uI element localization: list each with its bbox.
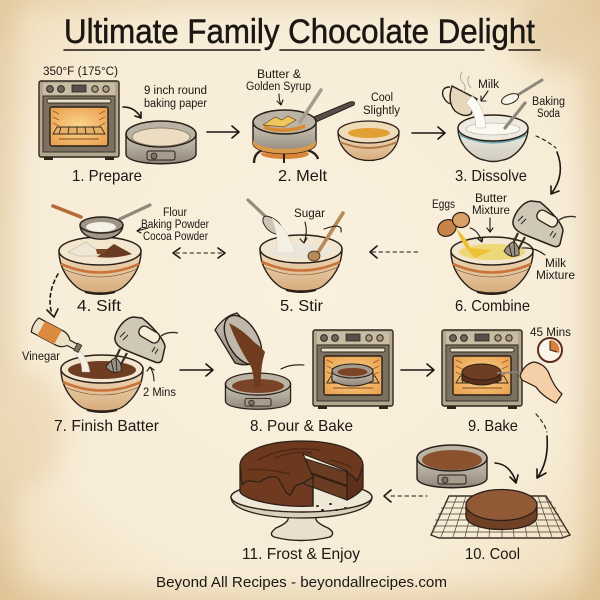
step 2: melt: Slightly (363, 105, 400, 117)
step label: 8. Pour & Bake (250, 418, 353, 435)
ingredient labels: Mixture (536, 270, 575, 282)
ingredients note: Flour (163, 207, 187, 219)
icon: tilted pan pouring batter (215, 309, 269, 387)
icon: vinegar bottle (30, 317, 90, 372)
milk label: Milk (478, 79, 499, 91)
timer note: 2 Mins (143, 387, 176, 399)
icon: bowl with batter (451, 237, 533, 294)
icon: mixing bowl (458, 115, 528, 162)
step 2: melt (246, 69, 400, 185)
step 2: melt: Golden Syrup (246, 81, 311, 93)
arrow: pan to oven (281, 365, 304, 369)
oven temperature label: 350°F (175°C) (43, 66, 118, 78)
step 8: pour and bake (215, 309, 393, 435)
icon: cake stand (231, 482, 372, 540)
ingredient labels: Milk (545, 258, 566, 270)
arrow: 4 to 7 (47, 274, 58, 317)
ingredient labels: Butter (475, 193, 507, 205)
icon: cooling rack (431, 496, 570, 538)
icon: cake on rack (466, 490, 537, 530)
step label: 3. Dissolve (455, 168, 527, 185)
arrow: 3 to 6 (536, 136, 560, 194)
step label: 11. Frost & Enjoy (242, 546, 360, 563)
step 1: prepare (39, 66, 207, 185)
step 1: prepare: baking paper (144, 98, 207, 110)
icon: frosted chocolate cake (240, 441, 363, 506)
icon: wooden spoon (308, 213, 343, 261)
baking soda label: Baking (532, 96, 565, 108)
icon: oven with pan (313, 330, 393, 409)
ingredients note: Cocoa Powder (143, 231, 208, 243)
icon: oven (39, 81, 119, 160)
icon: measuring spoon (500, 80, 542, 107)
icon: hand mixer (106, 317, 178, 373)
ingredients note (141, 207, 209, 243)
icon: bowl with sugar (260, 235, 342, 292)
cool note: Cool (371, 92, 393, 104)
icon: eggs (435, 212, 492, 258)
ingredient labels (432, 193, 575, 282)
butter note: Butter & (257, 69, 301, 81)
cake crumbs (317, 504, 346, 510)
arrow: pan to rack (495, 463, 518, 483)
step 5: stir (248, 200, 343, 315)
icon: sugar scoop (248, 200, 296, 253)
icon: hand with skewer (497, 362, 562, 403)
ingredients note: Baking Powder (141, 219, 209, 231)
arrow: 1 to 2 (207, 126, 239, 138)
step 4: sift (53, 205, 209, 315)
icon: bowl with flour and cocoa (59, 237, 141, 294)
icon: baked cake in pan (417, 445, 487, 488)
arrow: 10 to 11 (384, 490, 427, 502)
icon: bowl with batter (61, 355, 143, 412)
step label: 10. Cool (465, 546, 520, 563)
arrow: 6 to 5 (370, 246, 421, 258)
arrow: oven to pan (123, 107, 141, 118)
baking paper note: 9 inch round (144, 85, 207, 97)
step 3: dissolve: Soda (537, 108, 561, 120)
timer label: 45 Mins (530, 327, 571, 339)
arrow: double-headed 4 and 5 (173, 248, 225, 258)
step 7: finish batter (22, 317, 178, 435)
step label: 2. Melt (278, 168, 328, 185)
title: Ultimate Family Chocolate Delight (64, 13, 536, 51)
icon: oven with cake (442, 330, 522, 409)
icon: milk cup (443, 72, 486, 128)
arrow: 2 to 3 (412, 127, 445, 139)
arrow: 7 to 8 (180, 364, 213, 376)
sugar label: Sugar (294, 208, 325, 220)
step 9: bake (442, 327, 571, 435)
ingredient labels: Mixture (472, 205, 510, 217)
step label: 6. Combine (455, 298, 530, 315)
icon: clock (538, 338, 562, 362)
step label: 5. Stir (280, 298, 324, 315)
step 11: frost and enjoy (231, 441, 372, 563)
icon: burner (254, 149, 318, 163)
ingredient labels: Eggs (432, 199, 455, 211)
vinegar label: Vinegar (22, 351, 60, 363)
icon: stirring spoon (505, 103, 525, 128)
icon: cooling bowl (338, 121, 399, 160)
step 10: cool (417, 445, 570, 563)
step label: 7. Finish Batter (54, 418, 160, 435)
step label: 4. Sift (77, 298, 122, 315)
step label: 9. Bake (468, 418, 518, 435)
icon: sieve (53, 205, 150, 239)
icon: hand mixer (504, 201, 576, 257)
step 6: combine (432, 193, 576, 315)
icon: cake pan (126, 121, 196, 164)
icon: lower pan (225, 373, 291, 409)
footer credit: Beyond All Recipes - beyondallrecipes.com (156, 574, 447, 591)
timer note (143, 367, 176, 399)
arrow: 8 to 9 (401, 364, 434, 376)
arrow: 9 to 10 (536, 414, 547, 478)
step label: 1. Prepare (72, 168, 142, 185)
icon: saucepan (253, 90, 354, 154)
step 3: dissolve (443, 72, 565, 185)
